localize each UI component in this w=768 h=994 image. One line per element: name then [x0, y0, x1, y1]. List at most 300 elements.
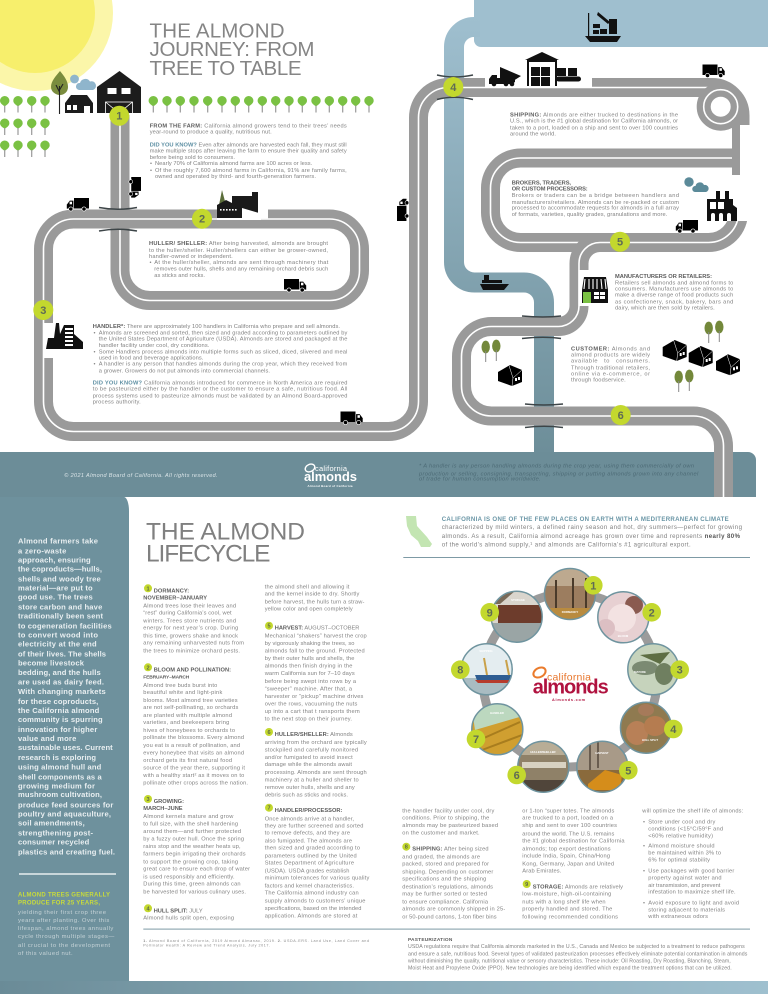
text column 3: shipping: to ensure compliance. California: [402, 899, 489, 905]
text column 1: dormancy, bloom, growing, hull split: orchard gets its first natural food: [143, 758, 232, 764]
photo: mature almonds: MATURE: [634, 670, 646, 674]
text: sidebar zero-waste copy: of their lives. The shells: [18, 650, 106, 659]
text: almond trees generally produce: ALMOND TREES GENERALLY: [18, 892, 110, 898]
text: mediterranean climate: of the world’s almond supply,¹ and almonds are California’s #1 agricultural export.: [442, 542, 691, 548]
text column 3: shipping: almonds may be pasteurized based: [402, 823, 498, 829]
photo: huller sheller: HULLER/SHELLER: [530, 750, 556, 754]
text: huller / sheller: [149, 241, 329, 279]
text column 5: storage conditions list: Use packages with good barrier: [648, 869, 734, 875]
text column 1: dormancy, bloom, growing, hull split: any remaining unharvested nuts from: [143, 641, 244, 647]
text column 5: storage conditions list: Almond moisture should: [648, 843, 715, 849]
text column 1: dormancy, bloom, growing, hull split: this time, growers shake and knock: [143, 634, 238, 640]
icon: sun: [0, 0, 113, 91]
text column 1: dormancy, bloom, growing, hull split: 1: [146, 586, 150, 592]
logo: california almonds center: almonds: [533, 676, 609, 698]
icon: dump truck: [489, 67, 521, 86]
text: sidebar zero-waste copy: material—are put to: [18, 583, 93, 592]
text column 1: dormancy, bloom, growing, hull split: Almond kernels mature and grow: [143, 814, 234, 820]
text: sidebar zero-waste copy: Almond farmers take: [18, 536, 98, 545]
text column 5: storage conditions list: •: [643, 819, 645, 825]
text: huller / sheller: to the huller/sheller. Huller/shellers can either be grower-owned,: [149, 248, 328, 254]
text column 2: harvest, huller, handler: 7: [267, 806, 271, 812]
text column 5: storage conditions list: •: [643, 843, 645, 849]
text: sidebar zero-waste copy: store carbon and have: [18, 602, 102, 611]
text: handler: [93, 324, 348, 406]
text column 2: harvest, huller, handler: remove outer hulls, shells and any: [265, 785, 355, 791]
text column 2: harvest, huller, handler: the almond shell and allowing it: [265, 584, 350, 590]
text column 3: shipping: the handler facility under cool, dry: [402, 808, 494, 814]
text column 3: shipping: specifications and the shipping: [402, 877, 486, 883]
text column 5: storage conditions list: storing adjacent to materials: [648, 908, 725, 914]
text: brokers, traders: manufacturers/retailers. Almonds can be re-packed or custom: [512, 200, 679, 206]
journey stop number badges: 3: [40, 305, 46, 317]
text: customer: available to consumers.: [571, 359, 650, 365]
text column 1: dormancy, bloom, growing, hull split: source of the year there, supporting it: [143, 765, 245, 771]
text: sidebar zero-waste copy: traditionally been sent: [18, 612, 103, 621]
icon: truck in huller loop: [284, 279, 306, 292]
text column 1: dormancy, bloom, growing, hull split: are not self-pollinating, so orchards: [143, 705, 238, 711]
text: customer: CUSTOMER: Almonds and: [571, 346, 650, 352]
text: shipping: [510, 112, 678, 138]
text: from the farm: before being sold to consumers.: [150, 155, 235, 161]
text: manufacturers or retailers: MANUFACTURERS OR RETAILERS:: [615, 274, 712, 280]
text column 4: storage: the #1 global destination for California: [522, 839, 625, 845]
text column 5: storage conditions list: property against water and: [648, 876, 722, 882]
text column 2: harvest, huller, handler: to remove defects, and they are: [265, 831, 350, 837]
text: handler: a grower. Growers do not put almonds into commercial channels.: [99, 369, 270, 375]
text column 5: storage conditions list: air transmission, and prevent: [648, 883, 721, 889]
text column 1: dormancy, bloom, growing, hull split: hives of honeybees to orchards to: [143, 728, 235, 734]
icon: truck on bottom road: [340, 412, 363, 425]
text: customer: Through traditional retailers,: [571, 365, 650, 371]
text column 3: shipping: or 50-pound cartons, 1-ton fiber bins: [402, 915, 497, 921]
icon: factory at stop 2: [217, 190, 261, 220]
text column 2: harvest, huller, handler: parameters outlined by the United: [265, 853, 357, 859]
text: shipping: U.S., which is the #1 global destination for California almonds, or: [510, 119, 678, 125]
text: sidebar zero-waste copy: poultry and aquaculture,: [18, 809, 111, 818]
photo: bloom: BLOOM: [618, 634, 629, 638]
text column 2: harvest, huller, handler: warm California sun for 7–10 days: [264, 671, 355, 677]
photo borders: [461, 568, 679, 792]
text: sidebar zero-waste copy: soil amendments,: [18, 818, 85, 827]
text: handler: •: [94, 361, 96, 367]
icon: cargo ship: [585, 12, 621, 42]
text column 2: harvest, huller, handler: stockpiled and carefully monitored: [265, 747, 358, 753]
text column 4: storage: 9: [525, 882, 528, 888]
text column 4: storage: include India, Spain, China/Hong: [522, 854, 610, 860]
text: sidebar zero-waste copy: research is exploring: [18, 753, 96, 762]
text column 1: dormancy, bloom, growing, hull split: “rest” during California’s cool, wet: [143, 611, 232, 617]
text: sidebar zero-waste copy: good use. The trees: [18, 593, 93, 602]
text: pasteurization: and ensure a safe, nutritious food. Several types of validated pasteurization processes effectively eliminate potential contamination in almonds: [408, 951, 748, 957]
text column 3: shipping: may be further sorted or tested: [402, 892, 487, 898]
icon: farm with barn, house, tree and clouds: [51, 71, 141, 114]
photo: mature almonds: [628, 644, 676, 694]
text column 5: storage conditions list: conditions (<15°C/59°F and: [648, 826, 723, 832]
text column 1: dormancy, bloom, growing, hull split: NOVEMBER–JANUARY: [143, 595, 207, 601]
photo: handler almonds: [471, 703, 523, 755]
text: customer: through foodservice.: [571, 378, 626, 384]
text: huller / sheller: •: [150, 260, 152, 266]
text: pasteurization: Moist Heat and Propylene Oxide (PPO). New technologies are being identified which expand the treatment options that can be utilized.: [408, 965, 732, 971]
text: sidebar zero-waste copy: approach, ensuring: [18, 555, 91, 564]
text: sidebar zero-waste copy: plastics and creating fuel.: [18, 848, 115, 857]
photo: storage: [491, 591, 543, 643]
logo: white california almonds: almonds: [304, 469, 357, 484]
text column 3: shipping: and graded, the almonds are: [402, 854, 480, 860]
icon: delivery truck top right: [702, 64, 725, 78]
text: sidebar zero-waste copy: With changing markets: [18, 687, 106, 696]
text column 5: storage conditions list: will optimize the shelf life of almonds:: [641, 808, 744, 814]
icon: olive trees and houses near customer road: [482, 321, 740, 392]
text: sidebar zero-waste copy: are used as dairy feed.: [18, 678, 104, 687]
photo: handler almonds: HANDLER: [490, 711, 504, 715]
text: pasteurization: PASTEURIZATION: [408, 937, 453, 943]
copyright line: © 2021 Almond Board of California. All rights reserved.: [64, 472, 218, 479]
text: sidebar zero-waste copy: electricity at the end: [18, 640, 97, 649]
text: almond trees generally produce: of this valued nut.: [18, 951, 73, 957]
text: brokers, traders: processed to accommodate requests for almonds in a full array: [512, 206, 679, 212]
photo: hull split: [621, 703, 670, 752]
text column 2: harvest, huller, handler: and/or fumigated to avoid insect: [265, 755, 353, 761]
text: mediterranean climate: characterized by mild winters, a defined rainy season and hot, dry summers—perfect for growing: [442, 524, 742, 531]
text column 3: shipping: packed, stored and prepared for: [402, 862, 489, 868]
text: sidebar zero-waste copy: for these coproducts,: [18, 697, 98, 706]
text: from the farm: DID YOU KNOW? Even after almonds are harvested each fall, they must still: [150, 143, 347, 149]
text: manufacturers or retailers: consumers. Manufacturers use almonds to: [615, 286, 733, 292]
text: huller / sheller: At the huller/sheller, almonds are sent through machinery that: [154, 260, 329, 266]
logo: california almonds center: Almonds.com: [552, 698, 586, 702]
text: sidebar zero-waste copy: using almond hull and: [18, 762, 102, 771]
text: shipping: taken to a port, loaded on a ship and sent to over 100 countries: [510, 126, 678, 132]
icon: small ship on river: [480, 275, 509, 290]
title: almond journey: [150, 19, 314, 80]
text column 1: dormancy, bloom, growing, hull split: BLOOM AND POLLINATION:: [154, 668, 231, 674]
text column 5: storage conditions list: Avoid exposure to light and avoid: [648, 901, 739, 907]
ring number badges: 7: [473, 734, 479, 746]
text column 2: harvest, huller, handler: by vigorously shaking the trees, so: [265, 641, 354, 647]
text: sidebar zero-waste copy: sustainable uses. Current: [18, 743, 113, 752]
text: handler: used in food and beverage applications.: [99, 355, 204, 361]
text column 4: storage: properly handled and stored. The: [522, 907, 612, 913]
text column 1: dormancy, bloom, growing, hull split: to full size, with the shell hardening: [143, 821, 238, 827]
text column 2: harvest, huller, handler: also fumigated. The almonds are: [265, 838, 352, 844]
text column 3: shipping: destination’s regulations, almonds: [402, 884, 493, 890]
footnote: handler definition: * A handler is any person handling almonds during the crop year, using them commercially of own: [419, 464, 694, 470]
text: from the farm: year-round to produce a quality, nutritious nut.: [150, 130, 272, 136]
text column 2: harvest, huller, handler: damage while the almonds await: [265, 762, 352, 768]
text: sidebar zero-waste copy: shell components as a: [18, 772, 102, 781]
text: handler: DID YOU KNOW? California almonds introduced for commerce in North America are required: [93, 380, 347, 386]
text column 5: storage conditions list: infestation to maximize shelf life.: [648, 890, 736, 896]
text: sidebar zero-waste copy: produce feed sources for: [18, 800, 113, 809]
text: sidebar zero-waste copy: a zero-waste: [18, 546, 66, 555]
ring number badges: 1: [590, 580, 596, 592]
text column 4: storage: Arab Emirates.: [522, 869, 562, 875]
text column 2: harvest, huller, handler: they are further screened and sorted: [265, 823, 363, 829]
text column 1: dormancy, bloom, growing, hull split: every honeybee that visits an almond: [143, 750, 244, 756]
text column 4: storage: ship and sent to over 100 countries: [522, 823, 617, 829]
text column 2: harvest, huller, handler: States Department of Agriculture: [265, 861, 354, 867]
footnote: handler definition: [418, 464, 699, 483]
text column 3: shipping: on the customer and market.: [402, 830, 480, 836]
text: huller / sheller: handler-owned or independent.: [149, 254, 233, 260]
text column 1: dormancy, bloom, growing, hull split: pollinate other crops across the nation.: [143, 780, 248, 786]
photo: huller sheller: [518, 742, 568, 792]
footnote: handler definition: of trade for human consumption worldwide.: [419, 477, 541, 483]
text: pasteurization: USDA regulations require that California almonds marketed in the U.S., Canada and Mexico be subjected to a treatment to reduce pathogens: [408, 944, 745, 950]
text column 2: harvest, huller, handler: specifications, based on the intended: [265, 906, 361, 912]
photo: shipping port: SHIPPING: [479, 649, 493, 653]
photo: dormancy orchard: [544, 568, 596, 620]
text column 2: harvest, huller, handler: by their outer hulls and shells, the: [265, 656, 354, 662]
text: manufacturers or retailers: dairy, which are then sold by retailers.: [615, 305, 715, 311]
text: brokers, traders: [512, 181, 679, 218]
text column 2: harvest, huller, handler: [264, 584, 370, 920]
icon: truck on long vertical road: [397, 199, 409, 221]
ring number badges: 3: [677, 665, 683, 677]
text column 2: harvest, huller, handler: Once almonds arrive at a handler,: [265, 816, 354, 822]
text column 4: storage: following recommended conditions: [522, 915, 618, 921]
text column 2: harvest, huller, handler: Mechanical “shakers” harvest the crop: [265, 634, 367, 640]
text column 2: harvest, huller, handler: to the next stop on their journey.: [265, 716, 352, 722]
text column 2: harvest, huller, handler: 5: [267, 624, 271, 630]
text: handler: •: [94, 349, 96, 355]
text column 1: dormancy, bloom, growing, hull split: by a fuzzy outer hull. Once the spring: [143, 836, 244, 842]
text column 3: shipping: [402, 808, 505, 921]
text: sidebar zero-waste copy: [18, 536, 115, 857]
icon: truck on vertical road: [129, 177, 141, 198]
text: sidebar zero-waste copy: the California almond: [18, 706, 100, 715]
text: almond trees generally produce: years after planting. Over this: [18, 918, 109, 924]
ring number badges: [451, 576, 689, 784]
icon: retail store: [582, 277, 608, 303]
text: sidebar zero-waste copy: become livestock: [18, 659, 85, 668]
text: sidebar zero-waste copy: consumer recycled: [18, 838, 90, 847]
photo: hull split: HULL SPLIT: [642, 738, 658, 742]
text column 2: harvest, huller, handler: HULLER/SHELLER: Almonds: [275, 732, 353, 738]
text: handler: to be pasteurized either by the handler or the customer to ensure a safe, nutritious food. All: [93, 387, 347, 393]
teal copyright panel: [0, 452, 756, 497]
text column 2: harvest, huller, handler: HARVEST: AUGUST–OCTOBER: [275, 626, 359, 632]
text: manufacturers or retailers: [615, 274, 733, 311]
text: almond trees generally produce: PRODUCE FOR 25 YEARS,: [18, 900, 100, 906]
photo: harvest: [578, 742, 626, 792]
text column 1: dormancy, bloom, growing, hull split: 2: [146, 665, 150, 671]
text column 5: storage conditions list: •: [643, 901, 645, 907]
text: from the farm: owned and operated by third- and fourth-generation farmers.: [155, 174, 316, 180]
text: from the farm: Nearly 70% of California almond farms are 100 acres or less.: [155, 161, 313, 167]
logo: white california almonds: california: [315, 464, 348, 473]
bottom gradient strip: [0, 981, 768, 994]
text column 2: harvest, huller, handler: yellow color and open completely: [265, 607, 353, 613]
icon: clouds near factory: [684, 177, 709, 192]
text: pasteurization: without diminishing the quality, nutritional value or sensory characteristics. These include: Oil Roasting, Dry Roasting, Blanching, Steam,: [408, 958, 731, 964]
text: pasteurization: [408, 937, 748, 971]
text column 4: storage: Kong, Germany, Japan and United: [522, 861, 614, 867]
title: almond lifecycle: THE ALMOND: [146, 518, 305, 546]
text: handler: Some Handlers process almonds into multiple forms such as sliced, diced, slivered and meal: [99, 349, 347, 355]
ring number badges: 2: [649, 607, 655, 619]
text: brokers, traders: OR CUSTOM PROCESSORS:: [512, 187, 588, 193]
text column 2: harvest, huller, handler: machinery at a huller and sheller to: [265, 777, 359, 783]
journey stop number badges: 4: [450, 82, 457, 94]
text: brokers, traders: of formats, varieties, quality grades, granulations and more.: [512, 212, 668, 218]
text: handler: process authority.: [93, 400, 141, 406]
text column 1: dormancy, bloom, growing, hull split: [142, 584, 250, 922]
text column 1: dormancy, bloom, growing, hull split: farmers begin irrigating their orchards: [143, 851, 246, 857]
title: almond lifecycle: LIFECYCLE: [146, 540, 270, 568]
text: handler: HANDLER*: There are approximately 100 handlers in California who prepare and sell almonds.: [93, 324, 340, 330]
text: sidebar zero-waste copy: mushroom cultivation,: [18, 790, 102, 799]
icon: handler facility: [46, 323, 83, 349]
text: handler: process systems used to pasteurize almonds must be validated by an Almond Board-approved: [93, 394, 347, 400]
text column 2: harvest, huller, handler: harvester or “pickup” machine drives: [265, 694, 364, 700]
rows of almond trees: [0, 96, 374, 157]
text: shipping: SHIPPING: Almonds are either trucked to destinations in the: [510, 112, 678, 118]
text column 5: storage conditions list: with extraneous odors: [647, 914, 708, 920]
journey stop number badges: [33, 77, 631, 425]
text column 5: storage conditions list: <60% relative humidity): [648, 833, 713, 839]
text column 2: harvest, huller, handler: almonds fall to the ground. Protected: [265, 649, 365, 655]
icon: factory right: [707, 191, 737, 221]
lifecycle ring diagram: [451, 568, 689, 794]
icon: california map: [406, 516, 432, 547]
text column 2: harvest, huller, handler: 6: [267, 730, 271, 736]
text column 1: dormancy, bloom, growing, hull split: During this time, green almonds can: [143, 882, 241, 888]
text: almond trees generally produce: [18, 892, 114, 957]
footnote: handler definition: production or selling, consigning, transporting, shipping or putting almonds grown into any channel: [418, 471, 699, 477]
text: manufacturers or retailers: make a diverse range of food products such: [615, 292, 733, 298]
text column 4: storage: or 1-ton “super totes. The almonds: [522, 808, 614, 814]
text: mediterranean climate: almonds. As a result, California almond acreage has grown over time and represents nearly 80%: [442, 533, 741, 540]
text: brokers, traders: Brokers or traders can be a bridge between handlers and: [512, 193, 679, 199]
icon: truck near brokers road: [676, 220, 698, 233]
text: sidebar zero-waste copy: innovation for higher: [18, 725, 97, 734]
text column 3: shipping: almonds are commonly shipped in 25-: [402, 907, 505, 913]
text column 1: dormancy, bloom, growing, hull split: great care to ensure each drop of water: [143, 867, 250, 873]
text: customer: [571, 346, 650, 384]
text: brokers, traders: BROKERS, TRADERS,: [512, 181, 571, 187]
text: huller / sheller: as sticks and rocks.: [154, 273, 205, 279]
photo: shipping port: [464, 644, 512, 694]
text: from the farm: •: [150, 168, 152, 174]
title: almond journey: TREE TO TABLE: [150, 57, 302, 80]
text column 2: harvest, huller, handler: over the rows, vacuuming the nuts: [265, 701, 358, 707]
text column 1: dormancy, bloom, growing, hull split: winters. Trees store nutrients and: [142, 619, 236, 625]
ring number badges: 6: [514, 770, 520, 782]
text column 2: harvest, huller, handler: almonds then finish drying in the: [265, 664, 352, 670]
text column 5: storage conditions list: 6% for optimal stability: [648, 858, 710, 864]
text: from the farm: [150, 124, 347, 180]
text: huller / sheller: HULLER/ SHELLER: After being harvested, almonds are brought: [149, 241, 328, 247]
text: from the farm: make multiple stops after leaving the farm to ensure their quality and safety: [150, 149, 347, 155]
text: handler: the United States Department of Agriculture (USDA). Almonds are stored and packaged at the: [99, 336, 347, 342]
text column 1: dormancy, bloom, growing, hull split: 3: [146, 797, 150, 803]
text: sidebar zero-waste copy: the coproducts—hulls,: [18, 565, 102, 574]
photo: harvest: HARVEST: [595, 751, 609, 755]
panel: zero-waste sidebar: [0, 497, 129, 994]
text column 1: dormancy, bloom, growing, hull split: beautiful white and light-pink: [143, 690, 222, 696]
text column 5: storage conditions list: be maintained within 3% to: [648, 850, 721, 856]
text column 2: harvest, huller, handler: before being swept into rows by a: [265, 679, 357, 685]
text column 3: shipping: SHIPPING: After being sized: [412, 846, 489, 852]
text: huller / sheller: removes outer hulls, shells and any remaining orchard debris such: [154, 266, 328, 272]
text column 1: dormancy, bloom, growing, hull split: around them—and further protected: [143, 829, 241, 835]
text column 1: dormancy, bloom, growing, hull split: blooms. Most almond tree varieties: [143, 698, 238, 704]
logo: california almonds center: [532, 665, 609, 702]
ring number badges: 5: [625, 765, 631, 777]
text: mediterranean climate: CALIFORNIA IS ONE OF THE FEW PLACES ON EARTH WITH A MEDITERRANEAN CLIMATE: [442, 516, 729, 523]
text column 4: storage: low-moisture, high-oil-containing: [522, 892, 611, 898]
text: almond trees generally produce: cycle through multiple stages—: [18, 934, 114, 940]
text column 1: dormancy, bloom, growing, hull split: you eat is a result of pollination, and: [143, 743, 240, 749]
text: shipping: around the world.: [510, 132, 556, 138]
text: from the farm: •: [150, 161, 152, 167]
text column 2: harvest, huller, handler: arriving from the orchard are typically: [265, 740, 367, 746]
text column 5: storage conditions list: Store under cool and dry: [648, 819, 715, 825]
text column 4: storage: [522, 808, 625, 921]
journey roads: [44, 76, 750, 497]
text column 2: harvest, huller, handler: up into a cart that t ransports them: [265, 709, 360, 715]
text: from the farm: Of the roughly 7,600 almond farms in California, 91% are family farms,: [155, 168, 347, 174]
logo: white california almonds: Almond Board of California: [308, 484, 353, 488]
road bridges over river and road: [99, 75, 563, 428]
text: sidebar zero-waste copy: to convert wood into: [18, 631, 98, 640]
text: manufacturers or retailers: Retailers sell almonds and almond forms to: [615, 280, 733, 286]
text column 1: dormancy, bloom, growing, hull split: pollinate the blossoms. Every almond: [143, 735, 244, 741]
text column 1: dormancy, bloom, growing, hull split: with a healthy start² as it moves on to: [142, 773, 244, 779]
river with top water band: [454, 0, 768, 452]
photo: bloom: [597, 591, 649, 643]
text: handler: •: [94, 330, 96, 336]
text column 1: dormancy, bloom, growing, hull split: Almond trees lose their leaves and: [143, 603, 236, 609]
text: handler: Almonds are screened and sorted, then sized and graded according to parameters outlined by: [99, 330, 348, 336]
text column 1: dormancy, bloom, growing, hull split: Almond hulls split open, exposing: [143, 916, 234, 922]
text: almond trees generally produce: all crucial to the development: [18, 943, 110, 949]
logo: california almonds center: california: [547, 672, 591, 684]
text column 4: storage: around the world. The U.S. remains: [522, 831, 614, 837]
text column 2: harvest, huller, handler: factors and kernel characteristics.: [265, 884, 354, 890]
text column 2: harvest, huller, handler: supply almonds to customers’ unique: [265, 899, 365, 905]
text column 2: harvest, huller, handler: minimum tolerances for various quality: [265, 876, 370, 882]
text column 3: shipping: shipping. Depending on customer: [402, 869, 493, 875]
text: customer: online via e-commerce, or: [571, 372, 650, 378]
text column 1: dormancy, bloom, growing, hull split: 4: [146, 906, 150, 912]
text column 1: dormancy, bloom, growing, hull split: rains stop and the weather heats up,: [143, 844, 241, 850]
text column 5: storage conditions list: [641, 808, 744, 920]
text: mediterranean climate: [442, 516, 742, 548]
text column 2: harvest, huller, handler: (USDA). USDA grades establish: [265, 868, 349, 874]
text: sidebar zero-waste copy: community is spurring: [18, 715, 103, 724]
journey stop number badges: 5: [617, 237, 623, 249]
text column 1: dormancy, bloom, growing, hull split: is used responsibly and efficiently.: [143, 874, 235, 880]
photo: storage: STORAGE: [511, 598, 525, 602]
text column 2: harvest, huller, handler: then sized and graded according to: [265, 845, 360, 851]
text column 2: harvest, huller, handler: debris such as sticks and rocks.: [265, 792, 348, 798]
text column 1: dormancy, bloom, growing, hull split: HULL SPLIT: JULY: [154, 909, 203, 915]
text: from the farm: FROM THE FARM: California almond growers tend to their trees’ needs: [150, 124, 347, 130]
text column 2: harvest, huller, handler: application. Almonds are stored at: [265, 914, 358, 920]
icon: truck near farm road: [67, 198, 89, 211]
ring number badges: 9: [487, 607, 493, 619]
text: sidebar zero-waste copy: to cogeneration facilities: [18, 622, 112, 631]
title: almond journey: JOURNEY: FROM: [150, 38, 314, 61]
title: almond lifecycle: [146, 518, 305, 568]
text column 1: dormancy, bloom, growing, hull split: be harvested for various culinary uses.: [143, 889, 246, 895]
text: sidebar zero-waste copy: bedding, and the hulls: [18, 668, 101, 677]
text column 1: dormancy, bloom, growing, hull split: FEBRUARY–MARCH: [143, 675, 190, 681]
